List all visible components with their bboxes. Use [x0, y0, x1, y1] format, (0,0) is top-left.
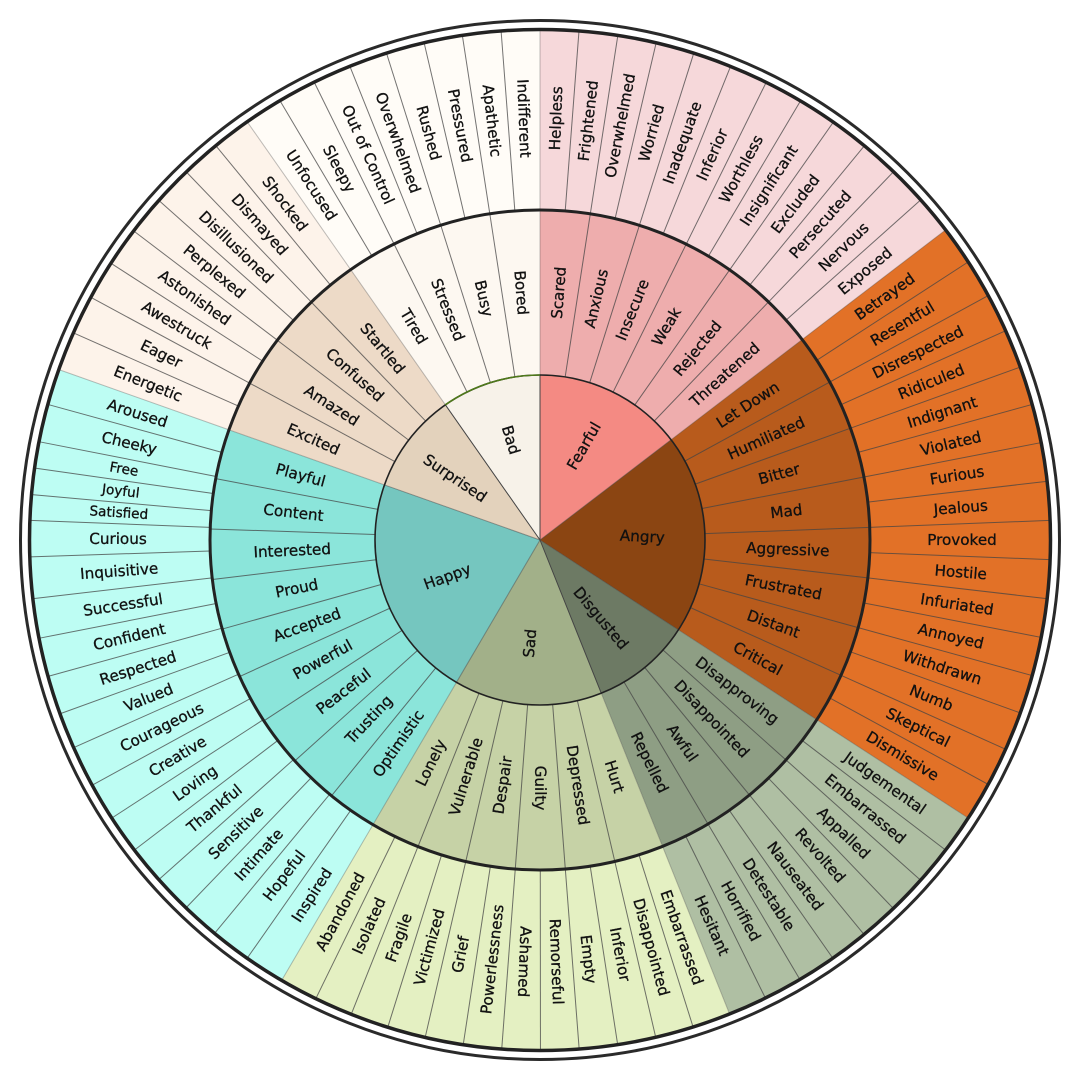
core wedge: Sad: Sad [520, 628, 540, 658]
panel: Happy outer ring: Inspired [288, 865, 336, 926]
panel: Sad middle ring: Depressed [563, 744, 593, 826]
core wedge: Bad [445, 375, 540, 540]
panel: Fearful middle ring: Threatened [686, 339, 764, 411]
panel: Angry outer ring: Dismissive [863, 728, 942, 785]
panel: Sad middle ring: Despair [489, 754, 516, 815]
core wedge: Happy: Happy [421, 560, 473, 594]
panel: Happy outer ring: Cheeky [100, 428, 159, 458]
panel: Bad outer ring: Sleepy [319, 142, 359, 196]
panel: Sad outer ring: Powerlessness [477, 904, 508, 1015]
core wedge: Disgusted [540, 540, 678, 693]
panel: Disgusted outer ring: Hesitant [690, 893, 733, 958]
panel: Happy outer ring: Satisfied [89, 503, 149, 523]
panel: Disgusted outer ring [663, 720, 968, 1014]
panel: Happy middle ring: Interested [253, 540, 331, 561]
panel: Fearful middle ring: Anxious [581, 267, 612, 330]
panel: Sad middle ring: Guilty [531, 766, 549, 810]
panel: Fearful outer ring: Nervous [815, 219, 873, 275]
panel: Angry outer ring: Disrespected [870, 322, 966, 382]
panel: Happy outer ring: Successful [82, 590, 164, 620]
panel: Bad middle ring: Tired [396, 305, 431, 347]
panel: Sad middle ring [373, 682, 663, 870]
panel: Surprised middle ring: Excited [284, 420, 342, 459]
panel: Fearful middle ring [540, 210, 802, 440]
panel: Happy outer ring: Respected [97, 648, 179, 689]
core wedge: Disgusted: Disgusted [569, 583, 632, 653]
panel: Happy outer ring: Inquisitive [79, 559, 159, 583]
panel: Fearful middle ring: Insecure [612, 277, 653, 343]
panel: Surprised middle ring: Amazed [301, 381, 362, 430]
panel: Surprised middle ring: Startled [356, 319, 409, 377]
panel: Happy middle ring: Powerful [290, 636, 356, 683]
panel: Fearful outer ring: Exposed [835, 244, 896, 299]
panel: Happy outer ring [30, 370, 373, 980]
panel: Disgusted middle ring: Awful [663, 721, 701, 765]
panel: Sad outer ring: Embarrassed [656, 888, 707, 987]
core wedge: Surprised [384, 405, 540, 540]
panel: Happy outer ring: Hopeful [259, 847, 309, 905]
panel: Sad middle ring: Vulnerable [445, 735, 487, 818]
panel: Fearful outer ring: Helpless [546, 86, 566, 151]
panel: Happy outer ring: Aroused [105, 396, 170, 431]
panel: Sad outer ring: Remorseful [546, 918, 567, 1005]
panel: Angry outer ring: Indignant [905, 393, 979, 432]
panel: Sad outer ring: Fragile [382, 911, 416, 965]
middle ring outline [210, 210, 870, 870]
panel: Happy middle ring: Playful [274, 460, 327, 491]
panel: Surprised outer ring: Dismayed [228, 190, 292, 259]
panel: Sad outer ring: Ashamed [514, 926, 535, 998]
panel: Bad middle ring [351, 210, 540, 405]
panel: Angry outer ring: Numb [907, 681, 956, 715]
panel: Sad middle ring: Hurt [601, 758, 628, 795]
panel: Angry outer ring: Violated [919, 428, 983, 459]
panel: Angry outer ring [802, 230, 1050, 818]
panel: Disgusted outer ring: Embarrassed [821, 770, 909, 848]
panel: Fearful middle ring: Scared [548, 266, 570, 319]
panel: Happy middle ring: Proud [274, 575, 320, 601]
panel: Bad outer ring: Pressured [444, 87, 476, 164]
panel: Bad middle ring: Busy [471, 278, 497, 319]
panel: Angry outer ring: Jealous [932, 497, 989, 519]
panel: Angry middle ring: Bitter [756, 460, 803, 488]
panel: Disgusted middle ring [601, 630, 817, 846]
panel: Happy middle ring: Accepted [271, 604, 343, 646]
panel: Surprised outer ring: Awestruck [138, 297, 215, 353]
panel: Disgusted outer ring: Nauseated [763, 838, 827, 914]
panel: Disgusted outer ring: Detestable [739, 855, 799, 934]
panel: Sad middle ring: Lonely [412, 737, 450, 789]
panel: Disgusted middle ring: Disapproving [692, 653, 782, 728]
panel: Happy middle ring: Content [262, 500, 325, 525]
panel: Surprised outer ring: Astonished [155, 266, 234, 329]
panel: Fearful outer ring: Overwhelmed [601, 72, 639, 179]
panel: Fearful middle ring: Weak [648, 304, 685, 349]
panel: Angry middle ring: Humiliated [725, 413, 808, 464]
panel: Angry outer ring: Resentful [867, 298, 938, 350]
panel: Surprised outer ring: Perplexed [180, 241, 249, 302]
panel: Sad outer ring: Grief [448, 934, 473, 974]
core wedge: Bad: Bad [498, 423, 524, 457]
panel: Surprised middle ring: Confused [322, 345, 387, 406]
panel: Angry middle ring: Critical [730, 638, 785, 679]
panel: Surprised outer ring: Eager [137, 336, 186, 372]
panel: Happy middle ring: Optimistic [369, 707, 428, 781]
panel: Fearful outer ring: Frightened [575, 79, 602, 162]
panel: Sad outer ring [282, 825, 729, 1050]
panel: Sad outer ring: Empty [577, 934, 600, 985]
inner ring outline [375, 375, 705, 705]
panel: Fearful outer ring: Insignificant [736, 142, 802, 229]
panel: Angry outer ring: Skeptical [883, 704, 953, 751]
panel: Angry middle ring [671, 340, 870, 720]
panel: Angry outer ring: Annoyed [916, 620, 985, 653]
panel: Happy outer ring: Courageous [117, 699, 207, 756]
panel: Angry middle ring: Aggressive [746, 539, 830, 560]
panel: Sad outer ring: Disappointed [629, 896, 673, 998]
panel: Disgusted outer ring: Judgemental [840, 748, 929, 818]
panel: Angry outer ring: Withdrawn [901, 647, 984, 689]
panel: Disgusted middle ring: Disappointed [670, 676, 753, 761]
panel: Fearful outer ring: Persecuted [786, 187, 855, 262]
panel: Happy middle ring: Peaceful [313, 665, 374, 718]
panel: Angry middle ring: Let Down [713, 378, 783, 432]
green arc on Bad wedge [445, 375, 540, 405]
panel: Happy outer ring: Valued [121, 680, 176, 716]
panel: Angry middle ring: Distant [745, 606, 802, 642]
panel: Angry outer ring: Infuriated [919, 590, 995, 619]
panel: Fearful outer ring: Worthless [716, 132, 767, 206]
panel: Sad outer ring: Isolated [349, 895, 390, 957]
panel: Angry outer ring: Furious [929, 462, 986, 489]
panel: Bad outer ring: Overwhelmed [371, 90, 424, 196]
panel: Angry middle ring: Mad [769, 501, 803, 522]
panel: Disgusted outer ring: Appalled [813, 804, 874, 863]
panel: Happy outer ring: Free [108, 459, 139, 480]
panel: Happy outer ring: Creative [146, 732, 210, 780]
panel: Disgusted outer ring: Revolted [791, 825, 849, 886]
panel: Bad outer ring: Indifferent [513, 79, 534, 158]
panel: Happy middle ring [210, 430, 457, 825]
panel: Sad outer ring: Abandoned [312, 869, 369, 954]
panel: Surprised middle ring [229, 270, 445, 485]
panel: Surprised outer ring: Energetic [111, 362, 185, 406]
panel: Fearful outer ring: Excluded [767, 171, 824, 237]
core wedge: Sad [457, 540, 601, 705]
panel: Angry outer ring: Provoked [927, 531, 997, 549]
panel: Fearful outer ring [540, 30, 945, 340]
panel: Surprised outer ring: Disillusioned [195, 207, 277, 287]
panel: Happy outer ring: Thankful [183, 781, 246, 837]
panel: Fearful outer ring: Inadequate [659, 99, 705, 186]
panel: Happy outer ring: Curious [89, 530, 147, 548]
panel: Disgusted outer ring: Horrified [717, 878, 764, 944]
panel: Bad outer ring: Rushed [412, 104, 445, 162]
panel: Angry outer ring: Ridiculed [896, 360, 967, 403]
panel: Angry middle ring: Frustrated [744, 571, 823, 604]
panel: Fearful outer ring: Worried [635, 102, 668, 164]
panel: Surprised outer ring: Shocked [258, 173, 311, 235]
panel: Happy outer ring: Joyful [100, 481, 140, 502]
panel: Disgusted middle ring: Repelled [627, 729, 672, 796]
panel: Happy outer ring: Confident [91, 620, 167, 654]
panel: Happy outer ring: Loving [170, 761, 221, 805]
core wedge: Angry: Angry [619, 527, 665, 547]
panel: Sad outer ring: Victimized [410, 907, 448, 988]
panel: Bad outer ring: Out of Control [338, 102, 398, 207]
core wedge: Fearful: Fearful [563, 419, 605, 473]
core wedge: Surprised: Surprised [420, 451, 490, 506]
core wedge: Happy [375, 485, 540, 682]
panel: Bad outer ring [247, 30, 540, 270]
panel: Happy middle ring: Trusting [341, 692, 396, 748]
panel: Angry outer ring: Hostile [934, 561, 988, 583]
core wedge: Fearful [540, 375, 671, 540]
panel: Bad outer ring: Unfocused [282, 147, 341, 224]
panel: Fearful outer ring: Inferior [693, 125, 732, 183]
panel: Happy outer ring: Sensitive [205, 802, 267, 863]
panel: Happy outer ring: Intimate [231, 825, 287, 885]
panel: Sad outer ring: Inferior [606, 926, 634, 984]
panel: Surprised outer ring [59, 122, 351, 430]
panel: Fearful middle ring: Rejected [670, 317, 726, 380]
panel: Bad middle ring: Stressed [427, 276, 468, 344]
core wedge dividers [59, 30, 968, 1014]
panel: Bad middle ring: Bored [510, 270, 532, 316]
core wedge: Angry [540, 440, 705, 630]
panel: Angry outer ring: Betrayed [851, 269, 918, 324]
panel: Bad outer ring: Apathetic [479, 84, 505, 158]
